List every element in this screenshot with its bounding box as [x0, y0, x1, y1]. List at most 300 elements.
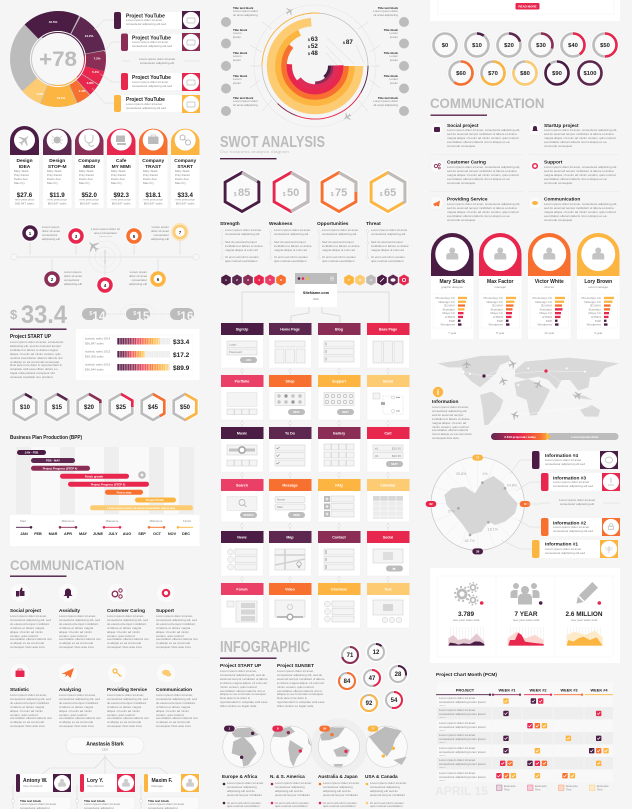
- team card: Mary Stark: PHP: [449, 319, 455, 323]
- heading: Business Plan Production: Business Plan Production (BPP): [10, 435, 82, 441]
- card: Company START: Company: [174, 158, 196, 164]
- timeline with numbered steps: 7: [179, 230, 182, 235]
- card: Company START: [171, 129, 200, 208]
- radar connector lines: [501, 460, 541, 549]
- card: SignUp: [221, 323, 264, 375]
- team card: Mary Stark: graphic designer: [441, 285, 463, 289]
- card: Music: [221, 427, 264, 479]
- team card: Max Factor: PHP: [497, 319, 503, 323]
- org chart: Maxim F.: [152, 778, 173, 784]
- org chart: Title text block: [84, 799, 105, 803]
- team card: Mary Stark: HTML5: [445, 315, 455, 319]
- hexagon price gauges: $15: [52, 405, 63, 411]
- text block: Project START UP: Project START UP: [220, 663, 262, 669]
- panel: milestones and months: Milestone: [62, 519, 75, 523]
- globe captions: Europe & Africa: [222, 774, 258, 779]
- radar chart: 27%: [448, 510, 456, 514]
- donut chart +78: 16.5%: [49, 20, 58, 24]
- labels left of radial chart: Title block: [233, 28, 248, 32]
- donut chart +78: +78: [39, 48, 77, 71]
- SWOT columns text: Sed do eiusmod tempor incididunt ut labore et dolore magna aliqua ut enim ad: [274, 240, 312, 252]
- card: SignUp: SignUp: [236, 328, 249, 332]
- progress rings row 1 and 2: $80: [520, 71, 530, 77]
- communication grid: Support: [156, 608, 174, 614]
- watermark: APRIL 15: APRIL 15: [435, 784, 488, 798]
- progress rings row 1 and 2: $10: [472, 43, 482, 49]
- progress rings row 1 and 2: $50: [600, 43, 610, 49]
- radial bar chart with values: $ 48: [308, 50, 318, 57]
- globe captions: Ut enim ad minim veniam quis nostrud exercitation: [275, 801, 309, 808]
- panel: statistics with icons and area charts: new year sales total: [513, 618, 540, 622]
- team card: Lory Brown: Illustrator: [589, 307, 601, 311]
- card: Design STOP-M: Design: [49, 158, 65, 164]
- card: Company TRAST: Max Fry: [143, 181, 154, 185]
- card: Shop: Shop: [286, 380, 295, 384]
- team card: Mary Stark: 7 year: [448, 331, 456, 335]
- team card: Victor White: Photoshop CC: [532, 296, 553, 300]
- card: Text: Text: [384, 588, 392, 592]
- panel: top white card with read more button: READ MORE: [518, 4, 537, 8]
- card: Cafe MY MIMI: new year price: [111, 198, 131, 202]
- labels left of radial chart: Title text block: [233, 6, 254, 10]
- world map: [438, 355, 619, 425]
- card: Design IDEA: IDEA: [19, 164, 31, 170]
- percentage rings cluster: 54: [391, 698, 398, 704]
- card: Company START: $33.4: [177, 192, 194, 199]
- hexagon price gauges: $20: [84, 405, 95, 411]
- communication list: Providing Service: [447, 196, 488, 202]
- org chart: Vice President: [23, 784, 42, 788]
- card: News: News: [237, 536, 247, 540]
- globe captions: Ut enim ad minim veniam quis nostrud exercitation: [323, 801, 357, 808]
- team card: Mary Stark: InDesign CC: [438, 300, 456, 304]
- card: Information #2: [541, 518, 620, 536]
- hexagon price gauges: [11, 390, 199, 424]
- panel: milestones and months: OCT: [153, 532, 162, 536]
- communication list: StartUp project: [544, 123, 579, 129]
- org chart: Title text block: [20, 799, 41, 803]
- team card: Lory Brown: 3D MAX: [590, 304, 601, 308]
- hexagon price gauges: $25: [116, 405, 127, 411]
- card: Cart: NEXT: [391, 463, 398, 466]
- labels left of radial chart: Title block: [233, 74, 248, 78]
- panel: milestones and months: SEP: [138, 532, 146, 536]
- heading: SWOT ANALYSIS: [220, 134, 325, 159]
- globes row: 77: [371, 727, 375, 731]
- progress rings row 1 and 2: [430, 30, 620, 88]
- SWOT columns text: Ut enim ad minim veniam quis nostrud exercitation: [225, 255, 259, 263]
- year pills $14 $15 $16: 15: [136, 309, 150, 323]
- card: Gallery: [318, 427, 360, 479]
- team card: Max Factor: Max Factor: [487, 279, 513, 285]
- communication grid: [10, 583, 199, 729]
- heading: COMMUNICATION right: COMMUNICATION: [430, 95, 544, 111]
- information block: Lorem ipsum dolor sit amet, consectetur adipiscing elit, sed do eiusmod tempor incididunt ut labore et dolore magna aliqua. Ut enim ad minim veniam, quis nostrud exercitation ullamco laboris nisi ut aliquip ex ea commodo consequat duis aute.: [432, 406, 472, 440]
- panel: statistics with icons and area charts: 2.6 MILLION: [566, 611, 603, 618]
- card: Shop: NEXT: [293, 411, 300, 414]
- panel: striped statistic bars: [76, 329, 200, 380]
- percentage rings cluster: 92: [366, 701, 373, 707]
- small hexagon nav icons left: [221, 274, 286, 286]
- hexagon price gauges: $50: [180, 405, 191, 411]
- information block: Information: [432, 399, 458, 405]
- card: Information #3: Information #3: [553, 476, 586, 482]
- panel: statistics with icons and area charts: new year sales total: [453, 618, 480, 622]
- panel: top white card with read more button: [430, 0, 620, 21]
- card: Cart: Cart: [384, 432, 392, 436]
- SWOT columns text: Sed do eiusmod tempor incididunt ut labore et dolore magna aliqua ut enim ad: [371, 240, 409, 252]
- timeline with numbered steps: 3: [75, 234, 78, 239]
- percentage rings cluster: 47: [369, 676, 376, 682]
- communication grid: Providing Service: [107, 687, 147, 693]
- team card: Victor White: PHP: [546, 319, 552, 323]
- card: Social 2: [367, 531, 410, 583]
- card: Message: Name: [277, 498, 285, 502]
- radar chart: 38: [476, 549, 480, 553]
- communication list: [430, 122, 620, 223]
- labels right of radial chart: Title text block: [378, 6, 398, 10]
- card: Social 2: Social: [383, 536, 393, 540]
- year pills $14 $15 $16: $: [133, 311, 136, 317]
- card: Project YouTube 2: [121, 33, 200, 51]
- panel: milestones and months: JUNE: [93, 532, 104, 536]
- radar chart: [426, 455, 530, 554]
- card: Design IDEA: Max Fry: [14, 181, 25, 185]
- panel: milestones and months: [10, 515, 200, 546]
- radial bar chart with values: $ 52: [308, 43, 318, 50]
- card: Company MEDI: MEDI: [83, 164, 96, 170]
- globe captions: [222, 774, 408, 809]
- globe captions: USA & Canada: [365, 774, 398, 779]
- donut chart +78: 3.8%: [87, 81, 94, 85]
- card: Video: Video: [285, 588, 296, 592]
- org chart: Anastasia Stark: [86, 742, 124, 748]
- radial bar chart with values: $ 87: [343, 39, 353, 46]
- progress rings row 1 and 2: $60: [456, 71, 466, 77]
- card: SignUp: Password: [229, 350, 243, 354]
- panel: milestones and months: APR: [64, 532, 72, 536]
- donut chart +78: 5.4%: [92, 70, 99, 74]
- team card: Lory Brown: Maya CC: [588, 311, 602, 315]
- radar chart: 8: [524, 502, 526, 506]
- card: Shop: [269, 375, 312, 427]
- progress bar: [491, 432, 618, 440]
- card: Project YouTube 3: Project YouTube: [132, 75, 171, 81]
- card: Design IDEA: $60,847 sales: [15, 202, 34, 206]
- card: Search: Search: [236, 484, 248, 488]
- communication list: Support: [544, 160, 563, 166]
- gantt chart: Lorem ipsum dolor sit amet consectetur adipiscing: [107, 506, 175, 510]
- SWOT columns text: Ut enim ad minim veniam quis nostrud exercitation: [274, 255, 308, 263]
- panel: milestones and months: Finish: [183, 519, 191, 523]
- card: Music: Music: [237, 432, 247, 436]
- card: Design IDEA: Poly Factor: [14, 173, 29, 177]
- radar chart: 18.1%: [488, 528, 499, 532]
- card: Cafe MY MIMI: $60,847 sales: [112, 202, 131, 206]
- year pills $14 $15 $16: $: [177, 311, 180, 317]
- globe captions: Ut enim ad minim veniam quis nostrud exercitation: [227, 801, 261, 808]
- card: Search: [221, 479, 264, 531]
- timeline with numbered steps: 4: [104, 283, 107, 288]
- small hexagon nav icons right: 8: [359, 278, 361, 282]
- card: Cafe MY MIMI: [107, 129, 136, 208]
- card: Portfolio: [221, 375, 264, 427]
- heading: Project Chart Month: Project Chart Month (PCM): [436, 672, 497, 678]
- card: Company MEDI: Poly Factor: [79, 173, 94, 177]
- globes row: 1: [228, 727, 230, 731]
- team card: Mary Stark: Wordpress: [441, 323, 455, 327]
- radar chart: 82: [429, 502, 433, 506]
- card: Design STOP-M: STOP-M: [48, 164, 66, 170]
- card: Cafe MY MIMI: Max Fry: [111, 181, 122, 185]
- radial bar chart with values: $ 63: [308, 36, 318, 43]
- card: Company TRAST: [139, 129, 168, 208]
- card: Gallery: Gallery: [333, 432, 345, 436]
- panel: milestones and months: JULY: [108, 532, 118, 536]
- SWOT columns text: Strength: [220, 221, 240, 227]
- team card: Lory Brown: event manager: [588, 285, 608, 289]
- card: Company START: Max Fry: [175, 181, 186, 185]
- team card: Lory Brown: Photoshop CC: [581, 296, 602, 300]
- SWOT hexagon gauges: $ 65: [380, 187, 396, 199]
- team card: Lory Brown: Lory Brown: [584, 279, 612, 285]
- card: Cart: #1: [375, 446, 379, 450]
- progress rings row 1 and 2: $40: [568, 43, 578, 49]
- SWOT columns text: Weakness: [269, 221, 293, 227]
- org chart: Vice Director: [87, 784, 104, 788]
- team card: Lory Brown: PHP: [595, 319, 601, 323]
- team card: Max Factor: Illustrator: [491, 307, 503, 311]
- card: Interview: [318, 583, 360, 628]
- labels right of radial chart: Title block: [384, 74, 398, 78]
- card: Cart: #2: [375, 454, 379, 458]
- year pills $14 $15 $16: 14: [92, 309, 106, 323]
- card: To Do: [269, 427, 312, 479]
- card: Information #2: Information #2: [553, 520, 586, 526]
- card: Project YouTube 1: [114, 11, 200, 29]
- progress rings row 1 and 2: $100: [584, 71, 596, 77]
- site name box and connectors: [242, 273, 389, 323]
- card: Company MEDI: [75, 129, 104, 208]
- globes row: [223, 718, 407, 775]
- team card: Lory Brown: Wordpress: [587, 323, 601, 327]
- card: Cafe MY MIMI: MY MIMI: [112, 164, 131, 170]
- information block: i: [437, 388, 439, 397]
- percentage rings cluster: 28: [395, 672, 402, 678]
- donut chart +78: 4.4%: [79, 89, 86, 93]
- small hexagon nav icons left: 1: [225, 278, 227, 282]
- gantt chart: [16, 447, 194, 514]
- SWOT hexagon gauges: $ 75: [331, 187, 347, 199]
- donut chart +78: 13.1%: [57, 96, 66, 100]
- card: Home Page: [269, 323, 312, 375]
- card: Design STOP-M: $60,847 sales: [48, 202, 67, 206]
- small hexagon nav icons left: 6: [280, 278, 282, 282]
- big value $33.4: 33.4: [21, 301, 67, 329]
- card: Information #1: [532, 540, 618, 558]
- panel: milestones and months: MAR: [49, 532, 58, 536]
- card: Message: Mail: [277, 505, 283, 509]
- card: Company MEDI: $52.0: [81, 192, 98, 199]
- card: Message: [269, 479, 312, 531]
- heading: COMMUNICATION left: COMMUNICATION: [10, 557, 124, 573]
- communication grid: Customer Caring: [107, 608, 145, 614]
- card: Cafe MY MIMI: Pedro Aun: [111, 177, 125, 181]
- panel: striped statistic bars: $17.2: [173, 352, 190, 359]
- card: Design STOP-M: Pedro Aun: [47, 177, 61, 181]
- panel: milestones and months: Start: [20, 519, 26, 523]
- gantt chart: FEB - MAY: [46, 459, 60, 463]
- percentage rings cluster: 84: [344, 679, 351, 685]
- radar chart: 25.8%: [456, 472, 467, 476]
- org chart: Lory Y.: [87, 778, 104, 784]
- labels right of radial chart: Title block: [384, 51, 398, 55]
- globe captions: N. & S. America: [270, 774, 305, 779]
- card: Cafe MY MIMI: Poly Factor: [111, 173, 126, 177]
- team card: Lory Brown: 3 year: [594, 331, 602, 335]
- card: Base Page: [367, 323, 410, 375]
- panel: milestones and months: DEC: [182, 532, 190, 536]
- card: Social: Social: [383, 380, 393, 384]
- panel: statistics with icons and area charts: new year sales total: [571, 618, 598, 622]
- communication grid: Assiduity: [59, 608, 80, 614]
- information block: [432, 387, 472, 441]
- labels right of radial chart: Title block: [384, 28, 398, 32]
- panel: milestones and months: Milestone: [106, 519, 119, 523]
- team card: Mary Stark: [431, 233, 474, 339]
- project schedule table: PROJECT: [456, 688, 475, 692]
- radar chart: 18.7%: [464, 539, 475, 543]
- card: SignUp: LOG: [246, 359, 251, 362]
- card: Video: [269, 583, 312, 628]
- SWOT columns text: Sed do eiusmod tempor incididunt ut labore et dolore magna aliqua ut enim ad: [225, 240, 263, 252]
- heading: INFOGRAPHIC: INFOGRAPHIC: [220, 639, 310, 656]
- panel: milestones and months: Milestone: [150, 519, 163, 523]
- org chart: Antony W.: [23, 778, 48, 784]
- note between information cards: [540, 499, 620, 508]
- team card: Victor White: Victor White: [535, 279, 564, 285]
- SWOT columns text: Sed do eiusmod tempor incididunt ut labore et dolore magna aliqua ut enim ad: [322, 240, 360, 252]
- percentage rings cluster: 12: [373, 650, 380, 656]
- card: Support: NEXT: [342, 411, 349, 414]
- panel: striped statistic bars: $90,847 sales: [85, 342, 104, 346]
- small hexagon nav icons left: 3: [247, 278, 249, 282]
- card: Company START: new year price: [175, 198, 195, 202]
- SWOT columns text: Opportunities: [317, 221, 349, 227]
- labels left of radial chart: [221, 6, 272, 116]
- panel: statistics with icons and area charts: [430, 568, 620, 663]
- SWOT hexagon gauges: [221, 168, 409, 216]
- heading: SWOT ANALYSIS: Our business analysis diagram: [220, 149, 290, 154]
- team card: Mary Stark: Mary Stark: [439, 279, 465, 285]
- communication list: Social project: [447, 123, 479, 129]
- progress bar: Lorem ipsum dolor: [571, 435, 599, 439]
- team card: Victor White: HTML5: [542, 315, 552, 319]
- communication list: Communication: [544, 196, 580, 202]
- small hexagon nav icons left: 2: [236, 278, 238, 282]
- card: Information #4: Information #4: [545, 453, 578, 459]
- SWOT columns text: Ut enim ad minim veniam quis nostrud exercitation: [322, 255, 356, 263]
- table legend: Text: [566, 788, 572, 792]
- communication list: Customer Caring: [447, 160, 486, 166]
- team card: Max Factor: 3D MAX: [492, 304, 503, 308]
- card: Project YouTube 2: Project YouTube: [132, 36, 171, 42]
- team card: Victor White: 3D MAX: [541, 304, 552, 308]
- team card: Max Factor: [479, 233, 522, 339]
- card: Home Page: Home Page: [280, 328, 300, 332]
- card: Company START: $60,847 sales: [176, 202, 195, 206]
- table legend: Text: [504, 788, 510, 792]
- SWOT columns text: [220, 221, 411, 265]
- progress rings row 1 and 2: $0: [442, 43, 448, 49]
- card: Project YouTube 1: Project YouTube: [126, 14, 165, 20]
- year pills $14 $15 $16: 16: [180, 309, 194, 323]
- card: Support: Support: [332, 380, 347, 384]
- communication grid: Communication: [156, 687, 192, 693]
- card: News: [221, 531, 264, 583]
- small hexagon nav icons left: 4: [258, 278, 260, 282]
- panel: striped statistic bars: statistic sales 2014: [85, 336, 111, 340]
- card: Design IDEA: new year price: [15, 198, 35, 202]
- timeline with numbered steps: 2: [51, 277, 54, 282]
- team card: Mary Stark: Maya CC: [442, 311, 456, 315]
- text block: Project START UP: Lorem ipsum dolor sit amet, consectetur adipiscing elit, sed do eiusmod tempor incididunt ut labore et dolore magna aliqua. Ut enim ad minim veniam, quis nostrud exercitation ullamco laboris nisi ut aliquip ex ea commodo consequat. Duis aute irure dolor in reprehenderit in voluptate velit esse cillum dolore eu fugiat nulla pariatur excepteur sint occaecat cupidatat non proident.: [10, 341, 63, 379]
- card: Cafe MY MIMI: Cafe: [116, 158, 127, 164]
- card: Company MEDI: $60,847 sales: [80, 202, 99, 206]
- hexagon price gauges: $10: [20, 405, 31, 411]
- card: Contact: [318, 531, 360, 583]
- team card: Victor White: InDesign CC: [535, 300, 553, 304]
- project schedule table: WEEK #1: [498, 688, 516, 692]
- org chart: CEO: [102, 748, 109, 752]
- card: Project YouTube 4: Project YouTube: [126, 97, 165, 103]
- card: Forum: Forum: [236, 588, 248, 592]
- SWOT columns text: Ut enim ad minim veniam quis nostrud exercitation: [371, 255, 405, 263]
- progress rings row 1 and 2: $20: [504, 43, 514, 49]
- org chart: [12, 737, 200, 809]
- labels left of radial chart: Title block: [233, 51, 248, 55]
- card: Project YouTube 3: [121, 73, 200, 91]
- card: Design IDEA: Design: [16, 158, 33, 164]
- card: Contact: Contact: [332, 536, 346, 540]
- team card: Max Factor: HTML5: [493, 315, 503, 319]
- radar chart: 24.8%: [507, 484, 518, 488]
- team card: Max Factor: Maya CC: [490, 311, 504, 315]
- radar chart: 12: [476, 456, 480, 460]
- card: Project YouTube 4: [114, 95, 200, 113]
- card: Design STOP-M: [43, 129, 72, 208]
- team card: Max Factor: manager: [494, 285, 506, 289]
- communication grid: Social project: [10, 608, 41, 614]
- panel: striped statistic bars: $33.4: [173, 339, 190, 346]
- card: Design STOP-M: Poly Factor: [47, 173, 62, 177]
- card: Company START: Pedro Aun: [175, 177, 189, 181]
- card: Design IDEA: Pedro Aun: [14, 177, 28, 181]
- small hexagon nav icons right: 9: [370, 278, 372, 282]
- note between cards: [122, 58, 200, 66]
- globe captions: Australia & Japan: [318, 774, 358, 779]
- radar chart: 1%: [482, 472, 488, 476]
- project schedule table: [436, 682, 613, 782]
- radial bar chart with values: [243, 0, 387, 138]
- table legend: Text: [597, 788, 603, 792]
- panel: striped statistic bars: $90,844 sales: [85, 368, 104, 372]
- text block: Project SUNSET: Project SUNSET: [277, 663, 314, 669]
- card: Company TRAST: TRAST: [145, 164, 161, 170]
- year pills $14 $15 $16: [82, 304, 194, 323]
- big value $33.4: $: [10, 307, 18, 322]
- card: Portfolio: Portfolio: [235, 380, 250, 384]
